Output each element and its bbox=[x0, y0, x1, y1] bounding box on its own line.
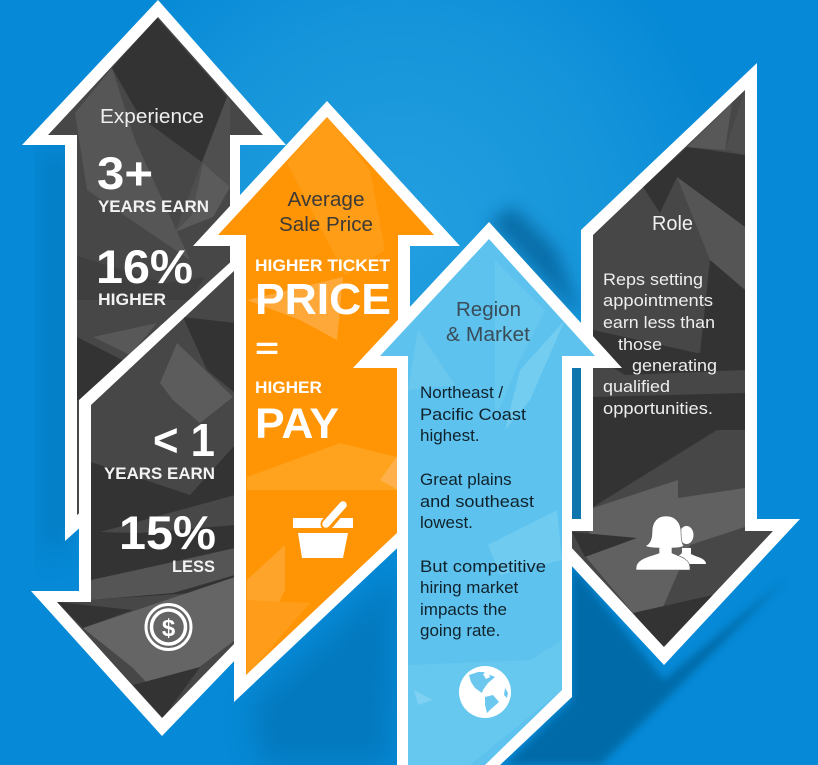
heading: average sale price bbox=[279, 189, 373, 236]
stat: equals: = bbox=[255, 332, 279, 365]
text: region details bbox=[420, 383, 546, 640]
stat: price: PRICE bbox=[255, 275, 391, 324]
text: role details: appointments bbox=[603, 291, 713, 310]
icon: globe bbox=[459, 666, 511, 718]
heading: region and market bbox=[446, 299, 530, 346]
panel: average sale price arrow bbox=[193, 101, 460, 702]
text: region details: Great plains bbox=[420, 470, 512, 489]
heading: average sale price: Average bbox=[288, 189, 364, 211]
text: region details: Northeast / bbox=[420, 383, 503, 402]
label: years earn: YEARS EARN bbox=[98, 198, 209, 216]
text: region details: impacts the bbox=[420, 600, 507, 619]
label: years earn lower: YEARS EARN bbox=[104, 465, 215, 483]
text: region details: hiring market bbox=[420, 578, 519, 597]
icon: dollar coin bbox=[146, 604, 191, 650]
icon: dollar coin: $ bbox=[162, 615, 176, 642]
shadows bbox=[45, 150, 785, 765]
stat: 15%: 15% bbox=[119, 506, 216, 559]
text: role details: Reps setting bbox=[603, 270, 703, 289]
stat: pay: PAY bbox=[255, 400, 339, 448]
panel: role arrow bbox=[572, 63, 800, 665]
panel: experience arrow bbox=[22, 0, 286, 541]
text: region details: and southeast bbox=[420, 492, 534, 511]
stat: 16%: 16% bbox=[96, 240, 193, 293]
text: region details: But competitive bbox=[420, 557, 546, 576]
icon: people bbox=[636, 516, 706, 570]
heading: experience: Experience bbox=[100, 106, 204, 128]
text: role details: opportunities. bbox=[603, 399, 713, 418]
icon: basket bbox=[293, 505, 353, 558]
text: role details: those bbox=[618, 335, 662, 354]
text: region details: lowest. bbox=[420, 513, 473, 532]
stat: less than 1: < 1 bbox=[153, 414, 215, 466]
text: region details: highest. bbox=[420, 426, 480, 445]
panel: region and market arrow bbox=[353, 222, 622, 765]
label: higher: HIGHER bbox=[98, 291, 166, 309]
label: higher ticket: HIGHER TICKET bbox=[255, 256, 391, 275]
text: role details: qualified bbox=[603, 377, 670, 396]
text: role details: earn less than bbox=[603, 313, 715, 332]
heading: region and market: Region bbox=[456, 299, 521, 321]
text: role details: generating bbox=[632, 356, 717, 375]
panel: under one year arrow bbox=[31, 258, 240, 736]
heading: average sale price: Sale Price bbox=[279, 214, 373, 236]
label: less: LESS bbox=[172, 558, 215, 576]
text: region details: going rate. bbox=[420, 621, 500, 640]
stat: 3+: 3+ bbox=[97, 148, 153, 199]
heading: role: Role bbox=[652, 213, 693, 235]
text: region details: Pacific Coast bbox=[420, 405, 526, 424]
heading: region and market: & Market bbox=[446, 324, 530, 346]
text: role details bbox=[603, 270, 717, 418]
label: higher pay: HIGHER bbox=[255, 378, 322, 397]
